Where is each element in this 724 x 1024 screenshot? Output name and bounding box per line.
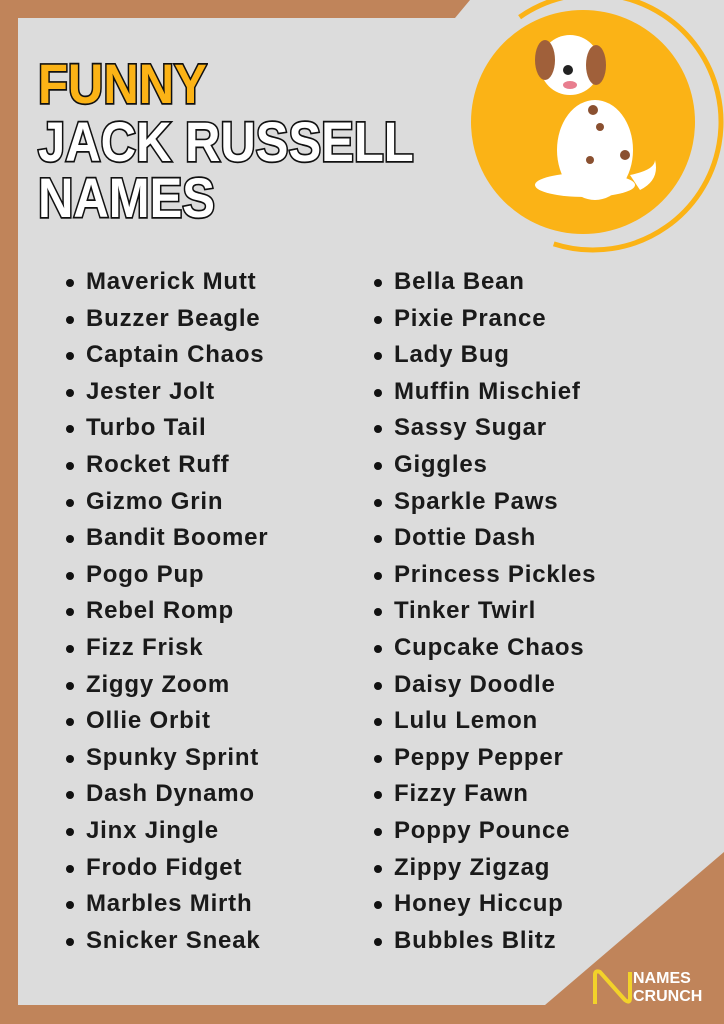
list: left column: Marbles Mirth (86, 890, 252, 917)
list: left column: Bandit Boomer (86, 524, 268, 551)
list: left column: Gizmo Grin (86, 488, 223, 515)
list: right column: Fizzy Fawn (394, 780, 529, 807)
list: right column: Honey Hiccup (394, 890, 564, 917)
list: right column: Sparkle Paws (394, 488, 558, 515)
list: left column: Fizz Frisk (86, 634, 203, 661)
list: left column: Spunky Sprint (86, 744, 259, 771)
list: right column: Lady Bug (394, 341, 510, 368)
title (37, 55, 414, 230)
list: left column: Maverick Mutt (86, 268, 256, 295)
list: right column: Tinker Twirl (394, 597, 536, 624)
title: JACK RUSSELL (38, 113, 414, 174)
list: left column: Jinx Jingle (86, 817, 219, 844)
list: right column: Muffin Mischief (394, 378, 581, 405)
list: right column: Sassy Sugar (394, 414, 547, 441)
list: left column: Jester Jolt (86, 378, 215, 405)
list: left column: Rocket Ruff (86, 451, 229, 478)
list: left column (66, 268, 268, 954)
title: FUNNY (38, 55, 207, 116)
orange circle (471, 10, 695, 234)
list: right column: Peppy Pepper (394, 744, 564, 771)
list: left column: Captain Chaos (86, 341, 264, 368)
list: left column: Dash Dynamo (86, 780, 255, 807)
list: right column: Bella Bean (394, 268, 525, 295)
list: left column: Frodo Fidget (86, 854, 242, 880)
list: right column (374, 268, 596, 954)
list: right column: Lulu Lemon (394, 707, 538, 734)
title: NAMES (38, 169, 215, 230)
list: left column: Rebel Romp (86, 597, 234, 624)
list: right column: Princess Pickles (394, 561, 596, 588)
ring arc (415, 0, 724, 300)
list: left column: Buzzer Beagle (86, 305, 260, 332)
list: left column: Ziggy Zoom (86, 671, 230, 698)
list: left column: Snicker Sneak (86, 927, 260, 954)
logo text: CRUNCH (633, 988, 702, 1005)
list: left column: Turbo Tail (86, 414, 206, 441)
list: left column: Pogo Pup (86, 561, 204, 588)
list: right column: Pixie Prance (394, 305, 546, 332)
list: right column: Giggles (394, 451, 488, 478)
list: right column: Cupcake Chaos (394, 634, 584, 661)
logo text: NAMES (633, 970, 691, 987)
list: right column: Bubbles Blitz (394, 927, 556, 954)
list: left column: Ollie Orbit (86, 707, 211, 734)
list: right column: Poppy Pounce (394, 817, 570, 844)
list: right column: Zippy Zigzag (394, 854, 550, 880)
logo icon (595, 971, 630, 1004)
list: right column: Dottie Dash (394, 524, 536, 551)
list: right column: Daisy Doodle (394, 671, 556, 698)
logo text (633, 970, 702, 1005)
icon: dog (535, 35, 656, 200)
